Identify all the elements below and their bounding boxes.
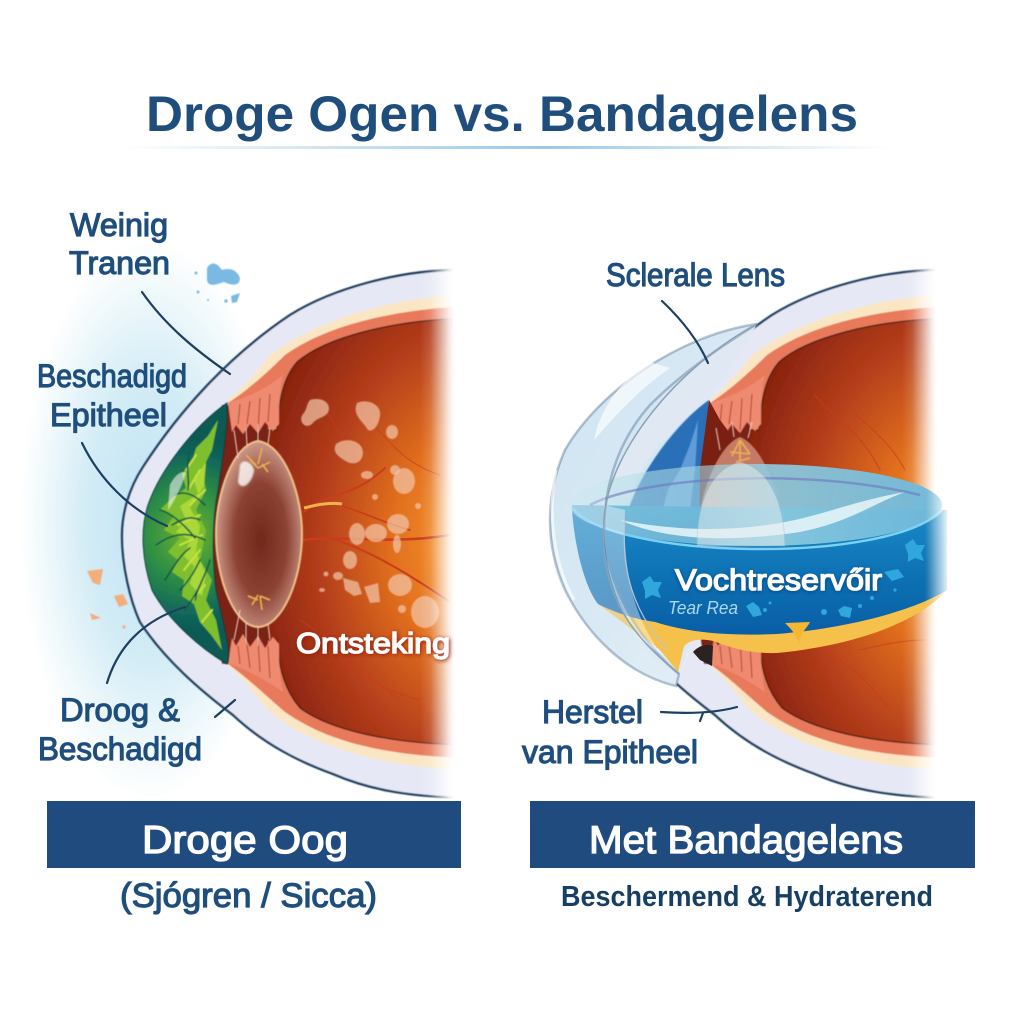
background glow [20, 240, 280, 800]
reservoir label: Vochtreservőir [675, 564, 882, 597]
label: Herstel van Epitheel [522, 694, 698, 770]
floating particles [642, 539, 925, 618]
banner: Droge Oog: Droge Oog [142, 819, 348, 862]
sclera tint [604, 324, 757, 674]
lens through surface [697, 462, 785, 546]
leader lines [82, 292, 235, 717]
crystalline lens [216, 424, 302, 646]
label: Weinig Tranen: Tranen [69, 245, 170, 281]
eye illustration [676, 268, 934, 799]
inflammation spots [301, 399, 439, 628]
label: Sclerale Lens: Sclerale Lens [606, 257, 785, 293]
inflammation label: Ontsteking [296, 628, 450, 660]
label: Droog & Beschadigd: Droog & [60, 692, 180, 728]
eye anatomy [676, 268, 934, 799]
icon: tear droplets [194, 264, 240, 303]
caption: protective and hydrating: Beschermend & Hydraterend [561, 881, 933, 913]
eye illustration [122, 270, 470, 798]
scleral lens overlay [550, 324, 757, 686]
scleral lens base [550, 324, 757, 686]
label: Droog & Beschadigd: Beschadigd [38, 731, 202, 767]
banner: Met Bandagelens: Met Bandagelens [589, 819, 903, 862]
partial tear text: Tear Rea [668, 598, 738, 618]
chamber behind cornea [700, 400, 735, 520]
reservoir surface [570, 464, 942, 546]
label: Beschadigd Epitheel [37, 358, 187, 433]
icon: dry particles [87, 569, 128, 629]
damaged cornea [143, 403, 228, 664]
eye anatomy [122, 270, 470, 798]
panel: eye with bandage lens [522, 257, 952, 798]
label: Beschadigd Epitheel: Beschadigd [37, 358, 187, 394]
dark anterior gap [693, 645, 713, 666]
label: Beschadigd Epitheel: Epitheel [50, 397, 167, 433]
leader lines [661, 301, 737, 721]
banner: Droge Oog [47, 801, 461, 868]
yellow drip [785, 622, 810, 645]
label: Droog & Beschadigd [38, 692, 202, 767]
panel: dry eye [20, 207, 470, 800]
retinal veins [810, 395, 925, 710]
crystalline lens [697, 422, 785, 540]
title: Droge Ogen vs. Bandagelens [146, 86, 858, 142]
banner: Met Bandagelens [530, 801, 975, 868]
retinal veins [300, 400, 450, 700]
blue healed cornea [626, 400, 709, 600]
title underline [120, 146, 890, 149]
label: Herstel van Epitheel: Herstel [542, 694, 643, 730]
label: Weinig Tranen: Weinig [70, 207, 168, 243]
caption: Sjögren / Sicca: (Sjógren / Sicca) [120, 877, 377, 915]
reservoir band [572, 505, 947, 635]
label: Herstel van Epitheel: van Epitheel [522, 734, 698, 770]
label: Weinig Tranen [69, 207, 170, 281]
moisture reservoir [570, 462, 947, 672]
yellow tear layer [598, 590, 947, 672]
